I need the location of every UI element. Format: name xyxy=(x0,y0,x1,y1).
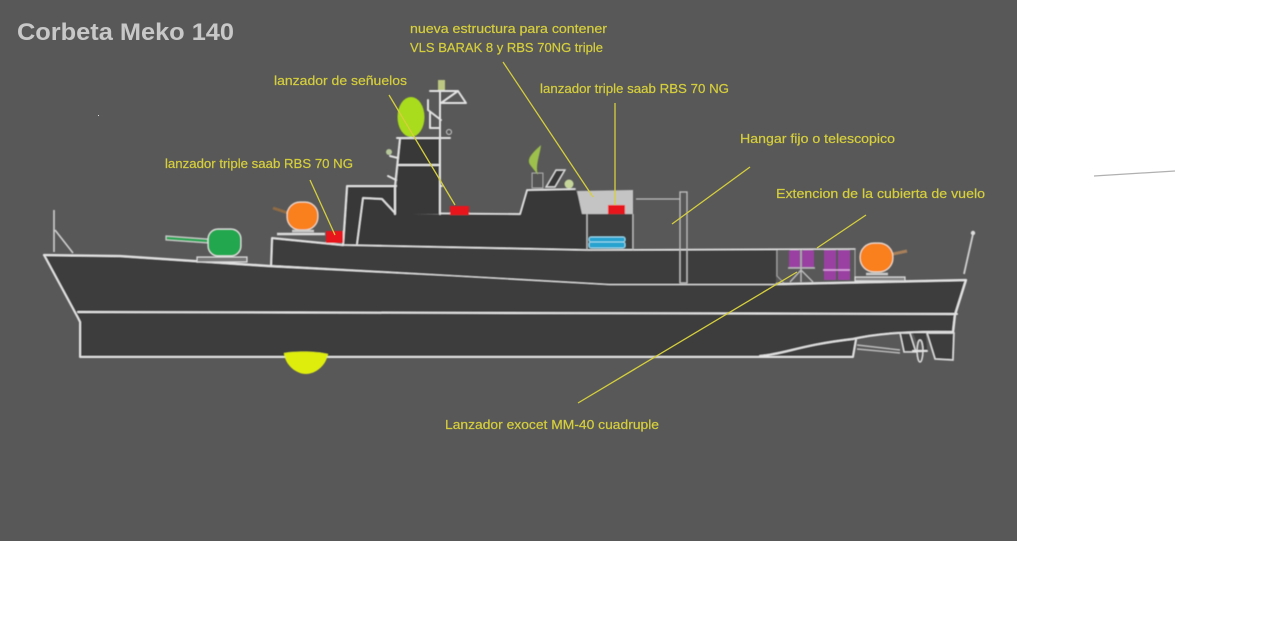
leader line: exocet xyxy=(578,272,797,403)
sonar dome xyxy=(284,352,328,374)
label: forward triple launcher: lanzador triple saab RBS 70 NG xyxy=(165,156,353,171)
blue boat xyxy=(589,237,625,248)
label: decoy launcher: lanzador de señuelos xyxy=(274,73,408,88)
red launcher at mast xyxy=(450,206,469,215)
funnel and exhaust xyxy=(529,145,574,188)
ship hull xyxy=(44,255,966,357)
stray line xyxy=(1094,171,1175,176)
leader line: senuelos xyxy=(389,95,455,205)
stray dot xyxy=(98,115,99,116)
label: hangar: Hangar fijo o telescopico xyxy=(740,131,895,146)
stern staff xyxy=(964,231,975,274)
leader line: forward launcher xyxy=(310,180,335,235)
leader line: flight deck xyxy=(817,215,866,248)
label: exocet launcher: Lanzador exocet MM-40 cuadruple xyxy=(445,417,659,432)
ship drawing xyxy=(44,80,975,374)
superstructure xyxy=(271,185,855,284)
title: Corbeta Meko 140 xyxy=(17,19,234,46)
red launcher forward xyxy=(326,231,343,243)
mast xyxy=(386,80,466,214)
green main gun xyxy=(166,229,247,262)
red launcher on new structure xyxy=(608,205,625,214)
purple exocet launchers xyxy=(788,250,850,282)
hangar outline xyxy=(636,192,687,283)
stern rudder and propeller xyxy=(857,333,954,362)
radar dome xyxy=(398,97,424,137)
leader line: aft triple launcher xyxy=(614,103,616,205)
orange forward gun xyxy=(273,202,325,234)
bow staff xyxy=(54,210,73,253)
panel: grey background xyxy=(0,0,1017,541)
label: aft triple launcher: lanzador triple saab RBS 70 NG xyxy=(540,81,729,96)
label: new structure: VLS BARAK 8 y RBS 70NG triple xyxy=(410,40,603,55)
flight deck extension xyxy=(777,249,855,283)
grey new structure xyxy=(577,190,633,214)
leader line: hangar xyxy=(672,167,750,224)
label: new structure xyxy=(410,21,608,55)
leader line: new structure xyxy=(503,62,593,197)
label: flight deck extension: Extencion de la cubierta de vuelo xyxy=(776,186,985,201)
label: new structure: nueva estructura para contener xyxy=(410,21,608,36)
orange aft gun xyxy=(855,243,907,281)
